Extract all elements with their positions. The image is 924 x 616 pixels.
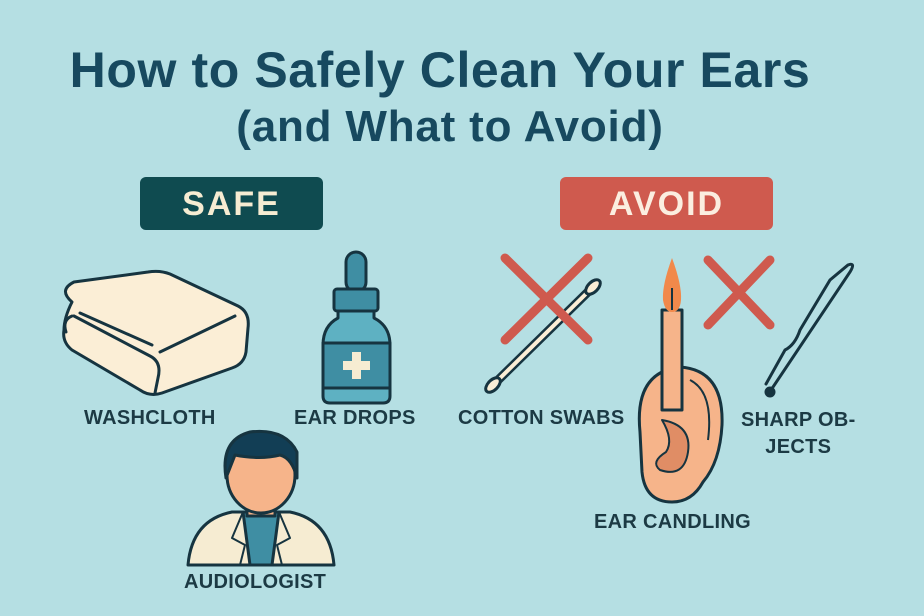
label: sharp objects xyxy=(741,409,856,458)
label: cotton swabs: COTTON SWABS xyxy=(458,407,625,429)
label: ear drops: EAR DROPS xyxy=(294,407,416,429)
badge: safe xyxy=(140,177,323,230)
icon: washcloth xyxy=(64,271,248,394)
label: sharp objects: SHARP OB- xyxy=(741,409,856,431)
icon: cotton swab xyxy=(483,277,603,395)
subtitle: (and What to Avoid) xyxy=(236,102,664,151)
badge: safe: SAFE xyxy=(182,185,281,223)
label: washcloth: WASHCLOTH xyxy=(84,407,216,429)
badge: avoid xyxy=(560,177,773,230)
label: ear candling: EAR CANDLING xyxy=(594,511,751,533)
icon: hairpin xyxy=(766,264,853,396)
label: sharp objects: JECTS xyxy=(765,436,831,458)
icon: ear candle xyxy=(639,258,722,502)
icon: ear drops xyxy=(323,252,390,403)
label: audiologist: AUDIOLOGIST xyxy=(184,571,326,593)
icon: red x 2 xyxy=(708,260,770,325)
badge: avoid: AVOID xyxy=(609,185,724,223)
title: How to Safely Clean Your Ears xyxy=(70,42,810,98)
icon: red x 1 xyxy=(505,258,588,340)
icon: audiologist xyxy=(188,431,334,565)
